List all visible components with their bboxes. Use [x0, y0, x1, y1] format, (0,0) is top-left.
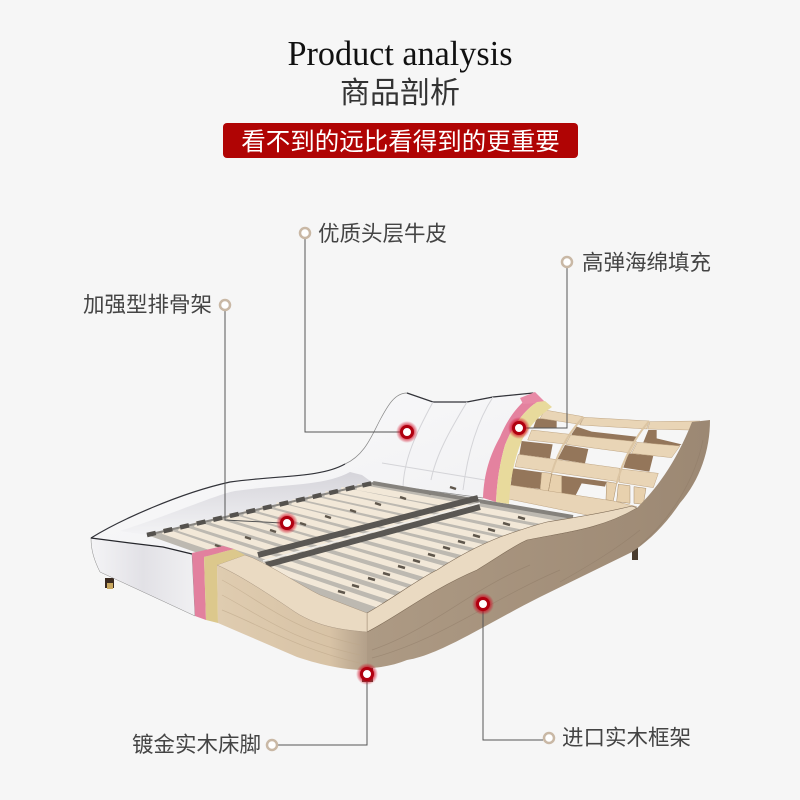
marker: feet	[356, 663, 378, 685]
title: Product analysis: Product analysis	[288, 34, 512, 73]
marker: frame	[472, 593, 494, 615]
headboard wood frame	[508, 410, 700, 518]
bottom bar	[508, 485, 637, 518]
label: feet: 镀金实木床脚	[132, 733, 261, 757]
end face: upholstery	[91, 538, 195, 616]
label: foam: 高弹海绵填充	[582, 251, 711, 275]
left wood face	[217, 565, 367, 670]
marker: slats	[276, 512, 298, 534]
label: slats: 加强型排骨架	[83, 293, 212, 317]
wood grain: left	[222, 580, 360, 663]
upholstery body	[91, 393, 538, 554]
banner: 看不到的远比看得到的更重要	[241, 128, 560, 156]
inner arm wall	[120, 472, 373, 535]
foot: right	[632, 548, 638, 560]
banner	[223, 123, 578, 158]
back rail	[147, 483, 573, 535]
yellow foam: headboard	[496, 401, 552, 504]
label: frame: 进口实木框架	[562, 726, 691, 750]
label: leather: 优质头层牛皮	[318, 222, 447, 246]
slat bed base	[147, 483, 573, 613]
wood grain: right	[372, 440, 703, 658]
right wood face	[367, 420, 710, 668]
piping: outer edge	[91, 393, 538, 538]
callout lines	[225, 239, 567, 745]
left rim	[217, 555, 367, 632]
foot: left	[105, 578, 114, 589]
piping: end edge	[91, 538, 192, 554]
middle bar	[528, 430, 680, 458]
lower bar	[515, 454, 658, 488]
yellow foam: end	[204, 549, 245, 623]
subtitle: 商品剖析	[340, 77, 460, 110]
upper bar	[540, 410, 700, 430]
frame brown interior	[511, 418, 682, 497]
marker: leather	[396, 421, 418, 443]
slats	[163, 487, 558, 606]
marker: foam	[508, 417, 530, 439]
headboard tufting	[382, 397, 493, 490]
vertical posts	[540, 472, 646, 504]
curved ribs	[552, 417, 649, 483]
centre rails	[258, 498, 480, 565]
pink foam: end	[192, 546, 234, 620]
pink top	[520, 392, 545, 404]
bed illustration	[91, 392, 710, 682]
slat clips	[215, 487, 525, 593]
pink foam: headboard	[483, 402, 537, 502]
foot: front	[362, 668, 373, 682]
right rim	[367, 506, 637, 632]
